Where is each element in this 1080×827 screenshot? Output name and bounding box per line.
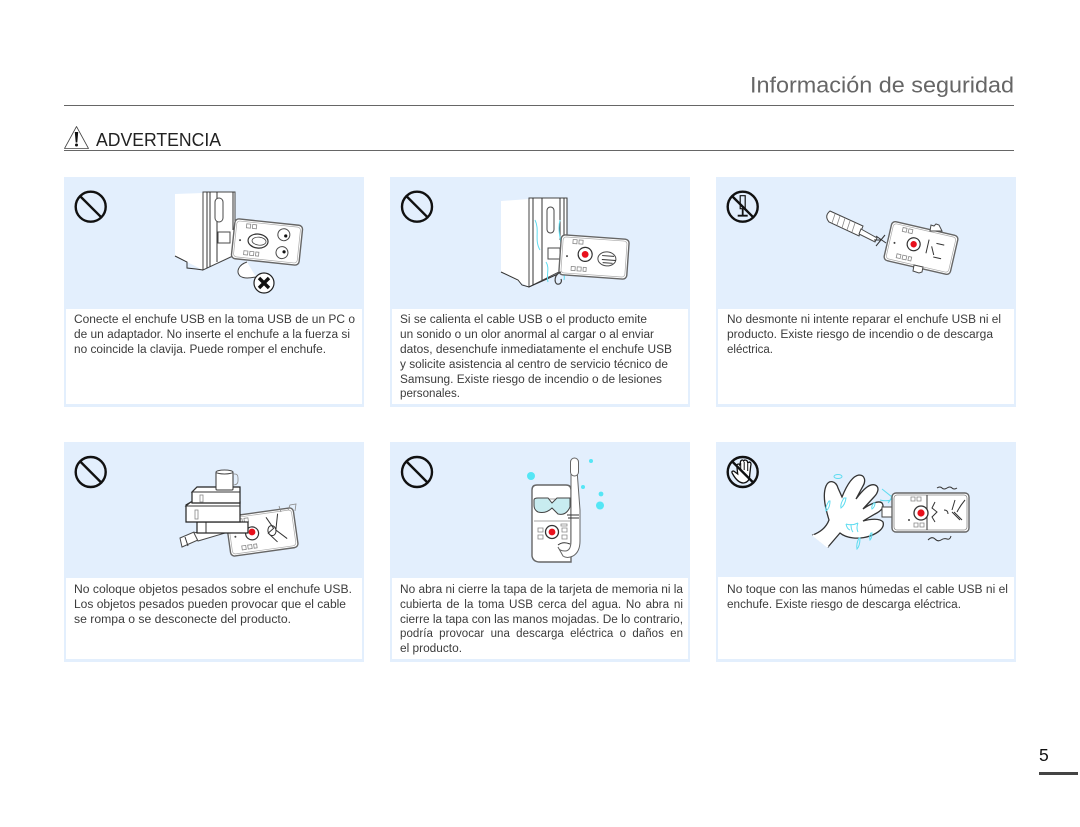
text block: no coincide la clavija. Puede romper el enchufe.: [74, 344, 326, 356]
heading: advertencia: [64, 126, 221, 150]
icon: prohibited: [402, 457, 432, 487]
text block: Samsung. Existe riesgo de incendio o de lesiones: [400, 374, 662, 386]
page number: 5: [1039, 745, 1049, 765]
header rule: [64, 105, 1014, 106]
text block: No desmonte ni intente reparar el enchufe USB ni el: [727, 314, 1001, 326]
text block: producto. Existe riesgo de incendio o de descarga: [727, 329, 994, 341]
text block: podría provocar una descarga eléctrica o daños en: [400, 628, 683, 640]
panel: heavy objects: [64, 442, 364, 662]
icon: warning triangle: [64, 126, 88, 148]
illustration: books on camera: [180, 470, 298, 557]
text block: y solicite asistencia al centro de servicio técnico de: [400, 359, 668, 371]
text block: un sonido o un olor anormal al cargar o al enviar: [400, 329, 654, 341]
icon: prohibited: [76, 457, 106, 487]
heading: advertencia: ADVERTENCIA: [96, 130, 221, 150]
text block: [400, 584, 684, 655]
text block: personales.: [400, 388, 460, 400]
title: Información de seguridad: [750, 72, 1014, 98]
illustration: wet hand touching USB: [813, 474, 969, 549]
text block: enchufe. Existe riesgo de descarga eléctrica.: [727, 599, 961, 611]
panel: USB plug force: [64, 177, 364, 407]
text block: Conecte el enchufe USB en la toma USB de un PC o: [74, 314, 355, 326]
text block: cubierta de la toma USB cerca del agua. No abra ni: [400, 599, 683, 611]
text block: [74, 584, 352, 626]
page tab bar: [1039, 772, 1078, 775]
icon: prohibited: [402, 192, 432, 222]
text block: No toque con las manos húmedas el cable USB ni el: [727, 584, 1008, 596]
text block: [727, 584, 1008, 611]
text block: [727, 314, 1001, 356]
illustration: camera forced into PC: [175, 192, 303, 293]
text block: de un adaptador. No inserte el enchufe a la fuerza si: [74, 329, 350, 341]
icon: no disassembly: [728, 192, 758, 222]
text block: [74, 314, 355, 356]
text block: [400, 314, 672, 400]
panel: wet hands: [716, 442, 1016, 662]
water bubbles: [527, 459, 604, 510]
illustration: overheating camera on PC: [501, 198, 629, 287]
text block: eléctrica.: [727, 344, 773, 356]
icon: prohibited: [76, 192, 106, 222]
illustration: camera with snorkel: [527, 458, 604, 562]
text block: No coloque objetos pesados sobre el enchufe USB.: [74, 584, 352, 596]
panel: overheating: [390, 177, 690, 407]
text block: cierre la tapa con las manos mojadas. De lo contrario,: [400, 614, 683, 626]
text block: No abra ni cierre la tapa de la tarjeta de memoria ni la: [400, 584, 684, 596]
panel: do not disassemble: [716, 177, 1016, 407]
text block: datos, desenchufe inmediatamente el enchufe USB: [400, 344, 672, 356]
text block: Los objetos pesados pueden provocar que el cable: [74, 599, 346, 611]
section rule: [64, 150, 1014, 151]
icon: no wet hands: [728, 457, 758, 487]
text block: el producto.: [400, 643, 462, 655]
text block: se rompa o se desconecte del producto.: [74, 614, 291, 626]
illustration: screwdriver on camera: [827, 211, 959, 275]
text block: Si se calienta el cable USB o el producto emite: [400, 314, 647, 326]
panel: water: [390, 442, 690, 662]
